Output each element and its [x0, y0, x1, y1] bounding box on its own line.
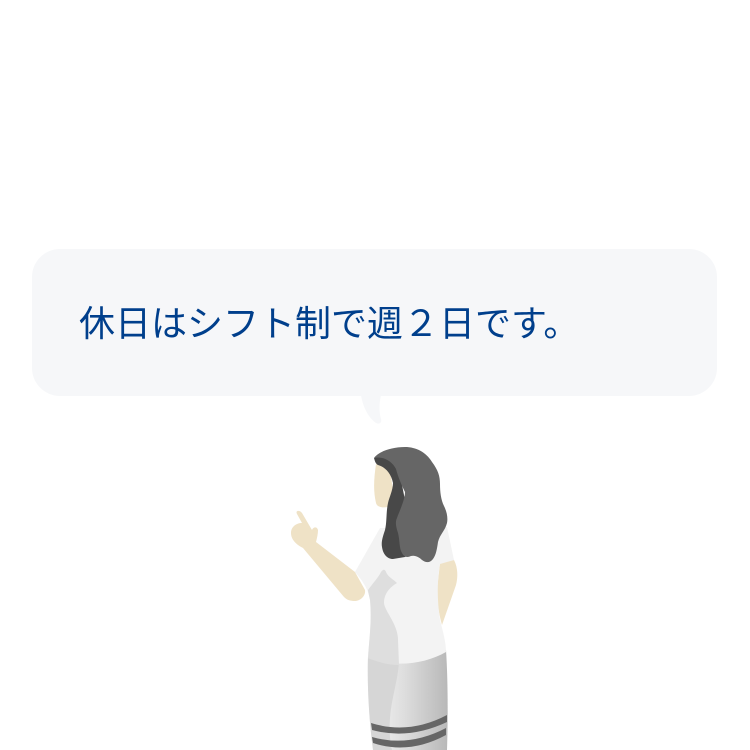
face and neck: [374, 464, 393, 507]
illustration: woman seen from behind: [291, 447, 457, 750]
bubble text: 休日はシフト制で週２日です。: [79, 303, 579, 344]
speech bubble: [32, 249, 717, 424]
skirt: [368, 650, 448, 750]
hair: [374, 447, 447, 562]
arm and pointing hand: [291, 511, 365, 601]
far arm: [437, 560, 457, 625]
shirt: [355, 527, 454, 665]
